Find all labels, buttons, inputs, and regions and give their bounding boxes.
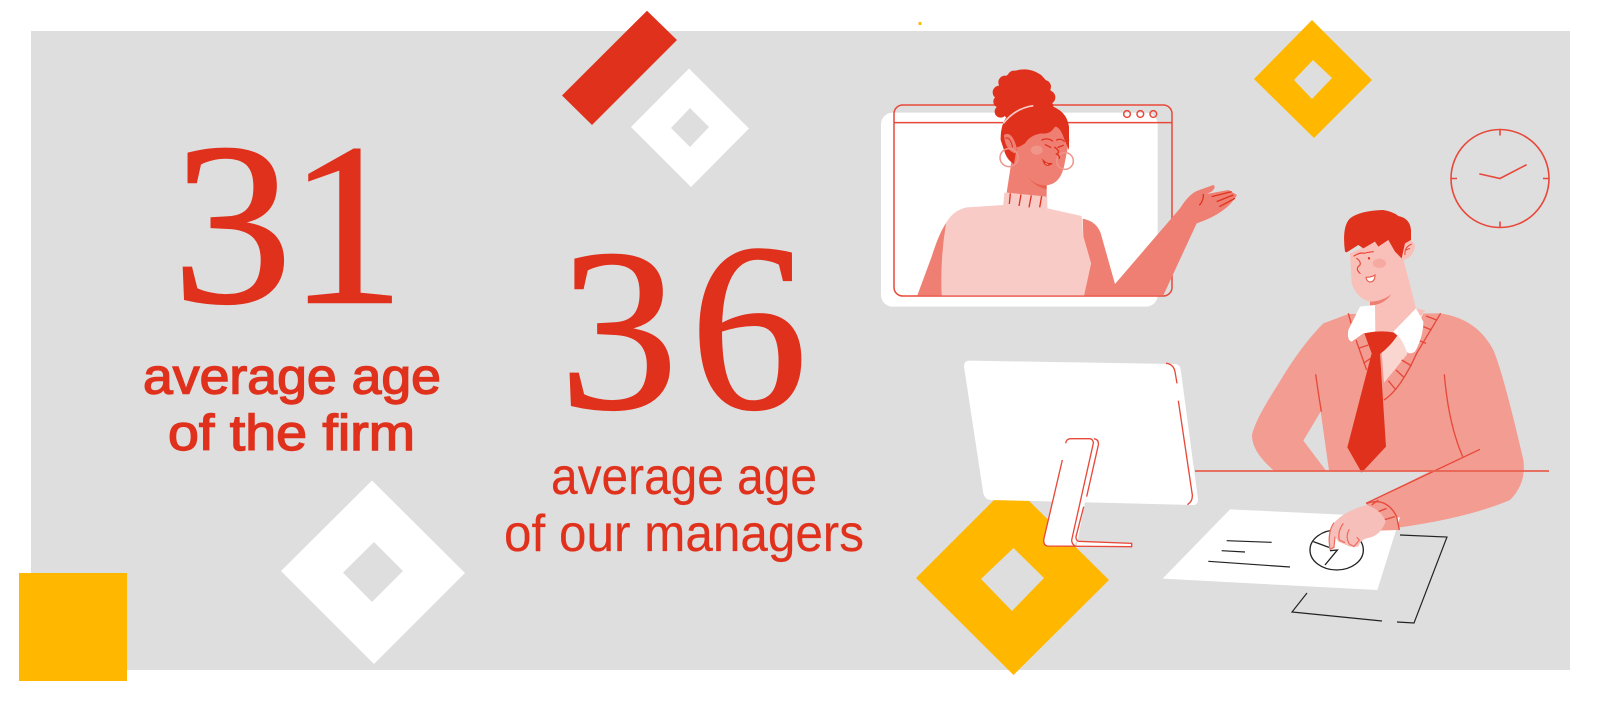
caption: average age of the firm [143,348,441,461]
illustration: desk objects [964,361,1447,623]
paper text lines [1208,541,1290,567]
caption: average age of the firm: average age [143,348,441,404]
woman hair bun [993,69,1055,124]
table line [1195,470,1549,472]
stat: 31: 1 [288,97,405,353]
yellow diamond top right [1254,20,1372,138]
woman neck and face [1007,117,1069,197]
woman face details [1031,145,1043,155]
yellow square [19,573,127,681]
woman hair [1001,104,1069,164]
hand [1328,505,1386,549]
caption: average age of the firm: of the firm [168,405,415,461]
video window frame [894,105,1172,296]
man sweater neckline [1348,313,1441,400]
man face details [1373,259,1386,268]
paper [1163,509,1400,590]
woman ear [1004,134,1017,153]
stat: 36: 3 [559,201,678,458]
woman top [941,193,1091,295]
illustration: man at desk [1252,210,1524,530]
man neck and face [1350,238,1426,332]
white diamond top [631,68,749,187]
white diamond bottom left [281,480,465,664]
caption: average age of our managers: of our managers [504,505,864,563]
big yellow diamond [916,483,1109,675]
stat: 31 [172,96,405,353]
man sweater [1252,313,1524,530]
man hair [1344,210,1411,258]
woman collar ribs [1009,193,1042,207]
woman hand lines [1199,192,1235,207]
stat: 36 [559,195,808,461]
cuff [1367,500,1399,531]
clock [1451,130,1549,228]
desk frame [1292,535,1447,623]
monitor edge line [1166,363,1192,505]
man ear [1403,241,1415,260]
video window backing [881,113,1158,307]
stat: 31: 3 [172,96,293,353]
monitor [964,361,1198,505]
man sleeve lines [1316,374,1480,503]
woman headband [1003,106,1033,123]
woman arm and shoulders [917,220,948,295]
caption: average age of our managers [504,448,864,563]
pie chart [1310,530,1363,570]
man collar [1348,305,1423,353]
woman earrings [1000,149,1018,167]
man shirt front [1380,313,1423,383]
red rectangle [562,11,677,125]
man tie [1347,331,1397,473]
small yellow dot [918,22,922,25]
stat: 36: 6 [690,195,808,461]
illustration: woman in video call [881,69,1237,307]
monitor stand [1043,439,1132,547]
caption: average age of our managers: average age [551,448,817,506]
